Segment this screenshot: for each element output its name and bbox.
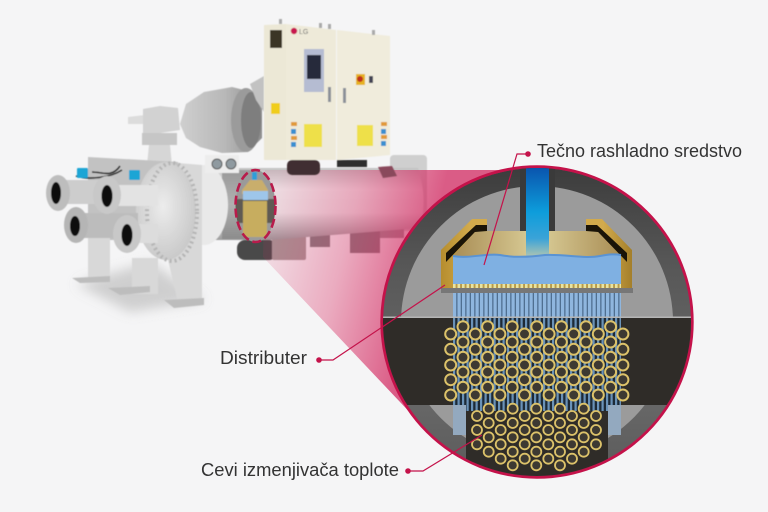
shell wall [383, 168, 691, 476]
channel head dome [136, 162, 196, 260]
label: Cevi izmenjivača toplote [201, 460, 399, 480]
feed pipe walls [520, 168, 555, 231]
grey shell section [222, 170, 256, 239]
outer ring [382, 167, 692, 477]
rear header box [88, 157, 178, 240]
shell interior [401, 186, 673, 458]
gauges [205, 155, 239, 173]
leader line [408, 435, 482, 471]
upper tube bundle [445, 321, 628, 400]
leader dot [316, 357, 322, 363]
end cover plate and legs [72, 163, 204, 308]
main cylinder shell [212, 168, 424, 240]
magnified cross-section [380, 167, 694, 485]
leader line [484, 154, 528, 265]
nozzle flange 2 [93, 176, 121, 214]
lower pipework [237, 236, 306, 260]
compressor [180, 76, 264, 153]
cabinet underside pipes [287, 160, 397, 178]
control cabling [76, 166, 122, 178]
yellow button [271, 103, 280, 114]
rear support legs [310, 226, 404, 253]
nozzle flange 4 [113, 215, 141, 253]
water surface [453, 254, 621, 257]
floor shadow [76, 262, 205, 312]
nozzle pipes [64, 180, 158, 243]
callout: distributor [220, 285, 445, 368]
callout: heat exchanger tubes [201, 435, 482, 480]
label: Distributer [220, 348, 307, 368]
fan vent [270, 30, 282, 48]
dark lower tube cavity [466, 411, 608, 476]
label: Tečno rashladno sredstvo [537, 141, 742, 161]
rear flange [390, 155, 427, 231]
display panel [304, 49, 324, 92]
blue side strips lower [453, 405, 466, 435]
distributor holes [453, 284, 621, 288]
dashed outline [236, 170, 276, 242]
basin black inner edge [446, 225, 487, 262]
feed stream [526, 168, 549, 256]
cabinet side [264, 24, 286, 160]
refrigerant strips over gray [453, 293, 621, 316]
nozzle flange 3 [64, 207, 88, 243]
control cabinet [264, 19, 397, 178]
water in basin [453, 254, 621, 284]
lower tube bundle [472, 404, 601, 470]
drip strips in the cavity [453, 318, 621, 411]
top eye bolts [279, 19, 375, 35]
chiller machine [46, 76, 427, 312]
nozzle flange 1 [46, 175, 70, 211]
cavity highlight line [380, 316, 694, 318]
right door [337, 30, 390, 160]
indicator tags [291, 122, 387, 147]
emergency stop [356, 74, 373, 85]
leader dot [405, 468, 411, 474]
blue side strips right [608, 405, 621, 435]
pink projection beam [263, 170, 505, 420]
blue valves [77, 168, 140, 180]
basin gold casing [441, 219, 632, 288]
cutaway contents [235, 170, 276, 242]
door handles [328, 87, 346, 103]
LG logo [291, 28, 308, 36]
bolted flange ring [147, 163, 197, 261]
callout: liquid refrigerant [484, 141, 742, 265]
left door [286, 24, 336, 160]
warning labels [304, 124, 373, 147]
dark upper tube cavity [380, 318, 694, 405]
suction elbow [128, 106, 180, 165]
leader dot [525, 151, 531, 157]
LG logo: LG [299, 29, 308, 36]
cylinder white end cap [180, 165, 228, 245]
leader line [319, 285, 445, 360]
basin drop shadow [441, 288, 633, 293]
dashed cutaway on shell [235, 170, 276, 242]
cross-section content [380, 168, 694, 485]
basin tan interior [454, 231, 619, 256]
basin black inner edge right [586, 225, 627, 262]
